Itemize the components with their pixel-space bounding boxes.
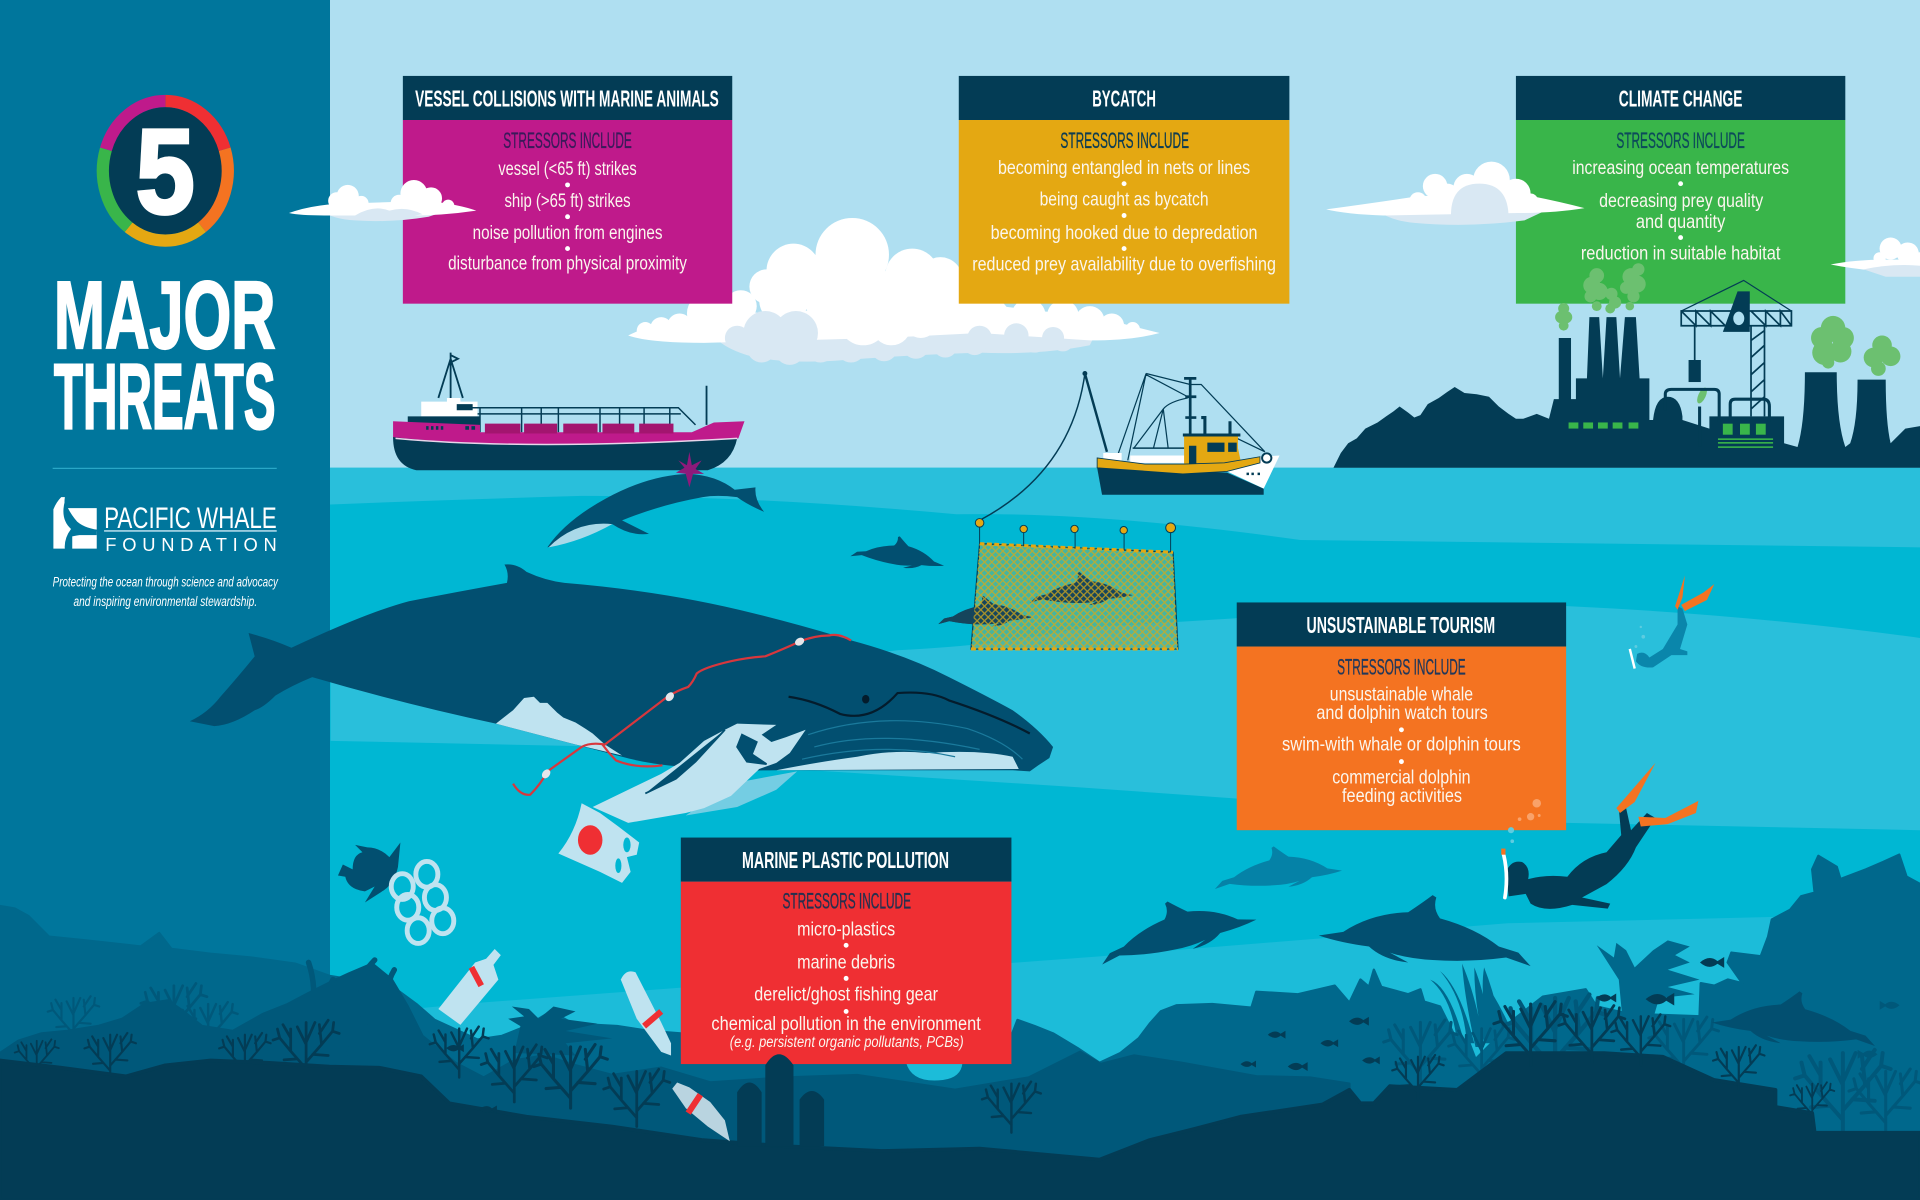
ship deck rails: [463, 408, 696, 432]
fishing boat: [980, 371, 1280, 520]
title: MAJOR: [54, 263, 276, 369]
tagline: and inspiring environmental stewardship.: [73, 594, 257, 609]
climate stressors list: and quantity: [1636, 211, 1725, 233]
climate stressors list: reduction in suitable habitat: [1581, 243, 1781, 265]
cargo ship: [393, 353, 744, 470]
plastic stressors label: STRESSORS INCLUDE: [782, 889, 911, 914]
fern coral: [1597, 940, 1700, 1019]
boat hull: [1097, 468, 1264, 495]
plastic bottle one: [438, 949, 501, 1025]
factory windows: [1569, 422, 1773, 448]
middle reef layer: [0, 960, 1349, 1200]
cloud: right of bycatch panel: [1326, 162, 1584, 225]
vessel heading: [403, 76, 732, 120]
boat rigging: [1117, 373, 1265, 460]
boat yellow gunwale: [1097, 457, 1260, 474]
plastic bottle two: [621, 971, 671, 1056]
dolphin: left: [1095, 890, 1260, 964]
vessel stressors list: vessel (<65 ft) strikes: [498, 158, 637, 180]
plastic stressor body: [681, 882, 1011, 1064]
second dolphin tail outside net: [938, 593, 1033, 631]
rope buoys: [540, 636, 806, 780]
dolphin: centre: [1319, 895, 1531, 966]
ship cabin: [421, 398, 478, 416]
plastic stressors list: (e.g. persistent organic pollutants, PCBs): [730, 1034, 964, 1051]
ship cargo domes: [485, 424, 673, 433]
ship navy hull: [393, 437, 737, 470]
bubbles: [1508, 799, 1541, 843]
bycatch stressors list: being caught as bycatch: [1040, 189, 1209, 211]
tourism heading: UNSUSTAINABLE TOURISM: [1307, 612, 1495, 638]
strike star: [676, 452, 704, 487]
plastic stressors list: derelict/ghost fishing gear: [754, 983, 938, 1005]
water gap in reef: [906, 1063, 962, 1081]
humpback whale: [190, 564, 1053, 823]
vessel stressors list: noise pollution from engines: [473, 222, 663, 244]
coral fans on back reef: [48, 984, 1920, 1133]
whale body: [190, 564, 1053, 771]
factory island with smoke: [1333, 263, 1920, 468]
tourism stressors list: feeding activities: [1342, 785, 1462, 807]
vessel stressors list: disturbance from physical proximity: [448, 252, 687, 274]
plastic heading: MARINE PLASTIC POLLUTION: [742, 847, 949, 873]
title: THREATS: [54, 345, 276, 449]
tourism stressors label: STRESSORS INCLUDE: [1337, 655, 1466, 680]
bycatch stressors list: becoming hooked due to depredation: [991, 222, 1258, 244]
fin dark markings: [645, 730, 767, 793]
vessel stressors list: [448, 158, 687, 274]
front reef silhouette: [0, 1002, 1920, 1200]
whale mouth line: [789, 693, 1030, 733]
front coral branches: [1392, 1002, 1834, 1120]
whale pectoral fin shadow: [686, 771, 797, 816]
boat cabin: [1184, 435, 1242, 473]
cloud: far right: [1831, 238, 1920, 277]
six-pack rings: [391, 861, 454, 943]
climate stressors list: [1572, 157, 1789, 265]
cloud: left over vessel panel: [289, 180, 476, 221]
boat white deck: [1103, 453, 1185, 463]
boat mast: [1184, 378, 1196, 435]
panel: unsustainable tourism: [1237, 602, 1566, 830]
whale pectoral fin: [593, 724, 806, 823]
bycatch heading: BYCATCH: [1092, 86, 1156, 112]
title: [54, 263, 276, 449]
dolphin: light: [1215, 846, 1342, 889]
ship portholes: [426, 426, 475, 430]
tourism stressors list: swim-with whale or dolphin tours: [1282, 734, 1521, 756]
climate stressors list: decreasing prey quality: [1599, 190, 1763, 212]
island and plant silhouette: [1333, 317, 1920, 468]
tourism stressors list: and dolphin watch tours: [1316, 702, 1488, 724]
whale lower jaw: [776, 752, 1019, 770]
bycatch stressors list: [972, 157, 1276, 276]
reef fish: [446, 957, 1900, 1113]
tourism stressor body: [1237, 647, 1566, 830]
climate heading: CLIMATE CHANGE: [1619, 86, 1742, 112]
vessel heading: VESSEL COLLISIONS WITH MARINE ANIMALS: [415, 86, 719, 112]
cloud: large centre: [628, 218, 1160, 365]
tourism stressors list: [1282, 683, 1521, 807]
net with trapped dolphins: [938, 519, 1178, 649]
minke whale struck by ship: [547, 474, 764, 547]
snorkeler: large: [1501, 763, 1698, 909]
ship magenta hull: [393, 421, 744, 444]
kelp fronds: [1430, 964, 1516, 1047]
bycatch stressors list: becoming entangled in nets or lines: [998, 157, 1250, 179]
bycatch stressors label: STRESSORS INCLUDE: [1060, 128, 1189, 153]
tourism stressors list: commercial dolphin: [1332, 767, 1471, 789]
plastic stressors list: micro-plastics: [797, 919, 895, 941]
panel: marine plastic pollution: [681, 838, 1011, 1064]
net mesh: [971, 544, 1178, 649]
tube coral pillars: [737, 1054, 824, 1146]
whale flank patch: [496, 697, 622, 756]
boat bow: [1227, 456, 1280, 489]
bycatch stressors list: reduced prey availability due to overfishing: [972, 254, 1276, 276]
vessel stressor body: [403, 120, 732, 304]
fans on mid reef: [15, 1020, 1041, 1133]
vessel stressors list: ship (>65 ft) strikes: [504, 190, 631, 212]
net panel: [971, 544, 1178, 649]
logo whale tail: [53, 497, 102, 550]
pilot whale: [850, 526, 948, 579]
tourism heading: [1237, 602, 1566, 647]
left panel background: [0, 0, 330, 1200]
ship mast: [438, 353, 707, 425]
trapped dolphin inside net: [938, 593, 1033, 631]
smoke plumes: [1555, 263, 1900, 405]
entangling rope: [513, 635, 851, 795]
sea turtle: [338, 842, 400, 902]
first trapped dolphin: [1030, 569, 1134, 610]
plastic stressors list: [711, 919, 981, 1051]
plastic stressors list: marine debris: [797, 952, 895, 974]
whale throat grooves: [802, 721, 1022, 759]
fern coral on mid reef: [508, 1007, 612, 1056]
snorkeler: small: [1630, 576, 1714, 669]
tagline: Protecting the ocean through science and advocacy: [53, 575, 279, 590]
kelp stalks: [309, 960, 394, 1053]
logo: Pacific Whale Foundation: [53, 497, 277, 555]
plastic stressors list: chemical pollution in the environment: [711, 1013, 981, 1035]
fins: [1616, 763, 1698, 827]
sky: [0, 0, 1920, 468]
climate heading: [1516, 76, 1845, 120]
plastic heading: [681, 838, 1011, 882]
number 5 ring: 5: [136, 105, 195, 239]
snorkeler body: [1506, 808, 1656, 909]
climate stressor body: [1516, 120, 1845, 304]
boat boom: [1085, 373, 1107, 452]
tourism stressors list: unsustainable whale: [1330, 683, 1473, 705]
bycatch stressor body: [959, 120, 1289, 304]
bycatch heading: [959, 76, 1289, 120]
plastic bottle three: [672, 1082, 730, 1141]
panel: bycatch: [959, 76, 1289, 304]
whale eye: [862, 695, 869, 703]
dolphin: in reef: [1712, 991, 1875, 1046]
net floats: [975, 519, 1176, 552]
back reef layer: [0, 855, 1920, 1200]
boat net line: [980, 373, 1085, 520]
crane and pipes: [1665, 280, 1791, 447]
logo: Pacific Whale Foundation: PACIFIC WHALE: [104, 502, 277, 535]
ocean: [0, 468, 1920, 1200]
logo: Pacific Whale Foundation: FOUNDATION: [105, 534, 277, 555]
plastic bag: [558, 803, 639, 883]
vessel stressors label: STRESSORS INCLUDE: [503, 128, 632, 153]
climate stressors label: STRESSORS INCLUDE: [1616, 128, 1745, 153]
climate stressors list: increasing ocean temperatures: [1572, 157, 1789, 179]
number 5 ring: [103, 101, 228, 241]
panel: climate change: [1516, 76, 1845, 304]
tagline: [53, 575, 279, 609]
net float lines: [971, 544, 1178, 649]
snorkel tube: [1504, 855, 1506, 898]
panel: vessel collisions: [403, 76, 732, 304]
